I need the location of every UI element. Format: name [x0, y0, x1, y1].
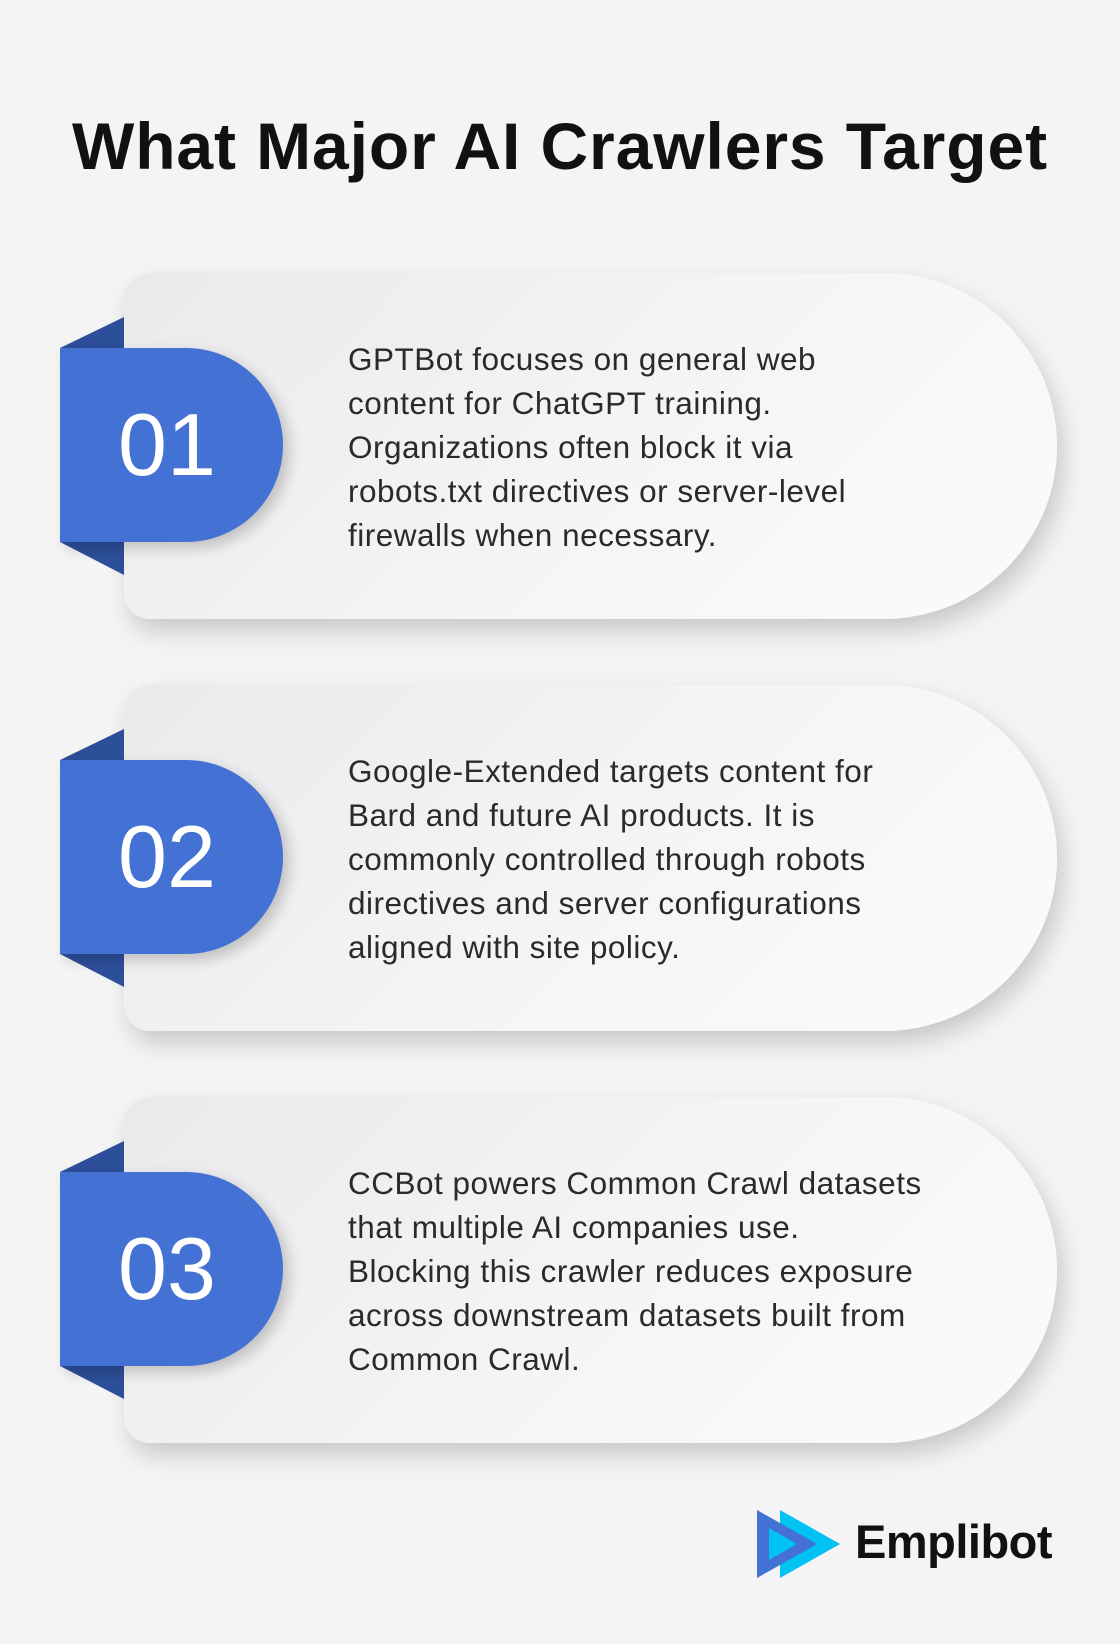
text: card 1: robots.txt directives or server-level: [348, 473, 846, 509]
panel: card 3: [124, 1097, 1057, 1443]
text: card 2: Bard and future AI products. It is: [348, 797, 815, 833]
number tab 03: 03: [118, 1219, 216, 1318]
panel: card 2: [124, 685, 1057, 1031]
number tab 03: [60, 1172, 283, 1366]
text: card 3: Common Crawl.: [348, 1341, 580, 1377]
text: card 1: GPTBot focuses on general web: [348, 341, 816, 377]
number tab 01: [60, 348, 283, 542]
text: card 1: firewalls when necessary.: [348, 517, 717, 553]
panel: card 1: [124, 273, 1057, 619]
text: card 1: Organizations often block it via: [348, 429, 793, 465]
logo text: Emplibot: [855, 1515, 1052, 1568]
fold: card 3: [60, 1141, 124, 1399]
text: card 3: Blocking this crawler reduces exposure: [348, 1253, 913, 1289]
text: card 2: commonly controlled through robots: [348, 841, 866, 877]
text: card 2: [348, 753, 873, 965]
text: card 2: Google-Extended targets content for: [348, 753, 873, 789]
text: card 1: [348, 341, 846, 553]
text: card 2: directives and server configurations: [348, 885, 862, 921]
fold: card 1: [60, 317, 124, 575]
text: card 3: that multiple AI companies use.: [348, 1209, 800, 1245]
title: What Major AI Crawlers Target: [72, 109, 1048, 183]
text: card 2: aligned with site policy.: [348, 929, 680, 965]
number tab 01: 01: [118, 395, 216, 494]
text: card 3: [348, 1165, 922, 1377]
text: card 3: CCBot powers Common Crawl datasets: [348, 1165, 922, 1201]
logo: [757, 1510, 1052, 1578]
number tab 02: [60, 760, 283, 954]
number tab 02: 02: [118, 807, 216, 906]
icon: logo arrows: [757, 1510, 840, 1578]
text: card 3: across downstream datasets built from: [348, 1297, 906, 1333]
fold: card 2: [60, 729, 124, 987]
text: card 1: content for ChatGPT training.: [348, 385, 772, 421]
